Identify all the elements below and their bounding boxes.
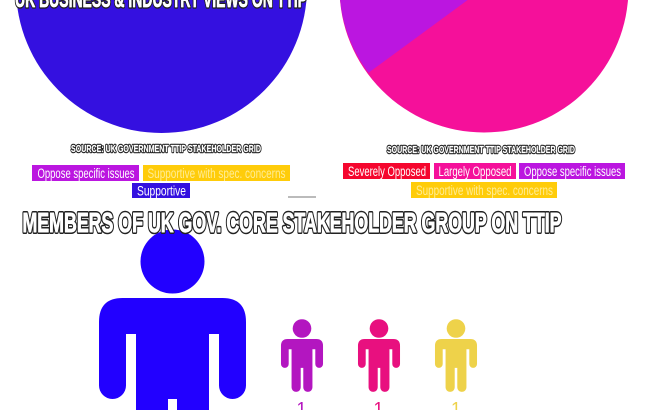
- icon: pink person: [358, 319, 400, 392]
- icon: yellow person: [435, 319, 477, 392]
- legend item: supportive with concerns: [411, 182, 557, 198]
- source note: business views: SOURCE: UK GOVERNMENT TTIP STAKEHOLDER GRID: [71, 143, 261, 155]
- heading: business views: [15, 0, 307, 13]
- source note: business views: SOURCE: UK GOVERNMENT TTIP STAKEHOLDER GRID: [71, 143, 261, 155]
- panel: core stakeholder group: [22, 207, 562, 410]
- source note: business views: [71, 143, 261, 155]
- legend item: supportive with concerns: Supportive with spec. concerns: [416, 183, 553, 198]
- legend item: oppose specific issues: [32, 165, 139, 181]
- legend item: supportive with concerns: Supportive with spec. concerns: [148, 166, 286, 181]
- legend item: severely opposed: [343, 163, 430, 179]
- panel: civil society views: [340, 0, 628, 198]
- icon: large blue person: [99, 230, 246, 410]
- legend item: largely opposed: [434, 163, 516, 179]
- legend: business views: [32, 165, 290, 198]
- pie chart: opposition views: [340, 0, 628, 132]
- panel: UK business and industry views: [15, 0, 307, 198]
- icon: purple person: [281, 319, 323, 392]
- legend item: oppose specific issues: Oppose specific issues: [38, 166, 135, 181]
- legend item: supportive: Supportive: [137, 184, 186, 198]
- legend item: severely opposed: Severely Opposed: [348, 164, 426, 179]
- pie chart: business views: [16, 0, 307, 133]
- legend: opposition views: [343, 163, 625, 198]
- legend item: largely opposed: Largely Opposed: [438, 164, 512, 179]
